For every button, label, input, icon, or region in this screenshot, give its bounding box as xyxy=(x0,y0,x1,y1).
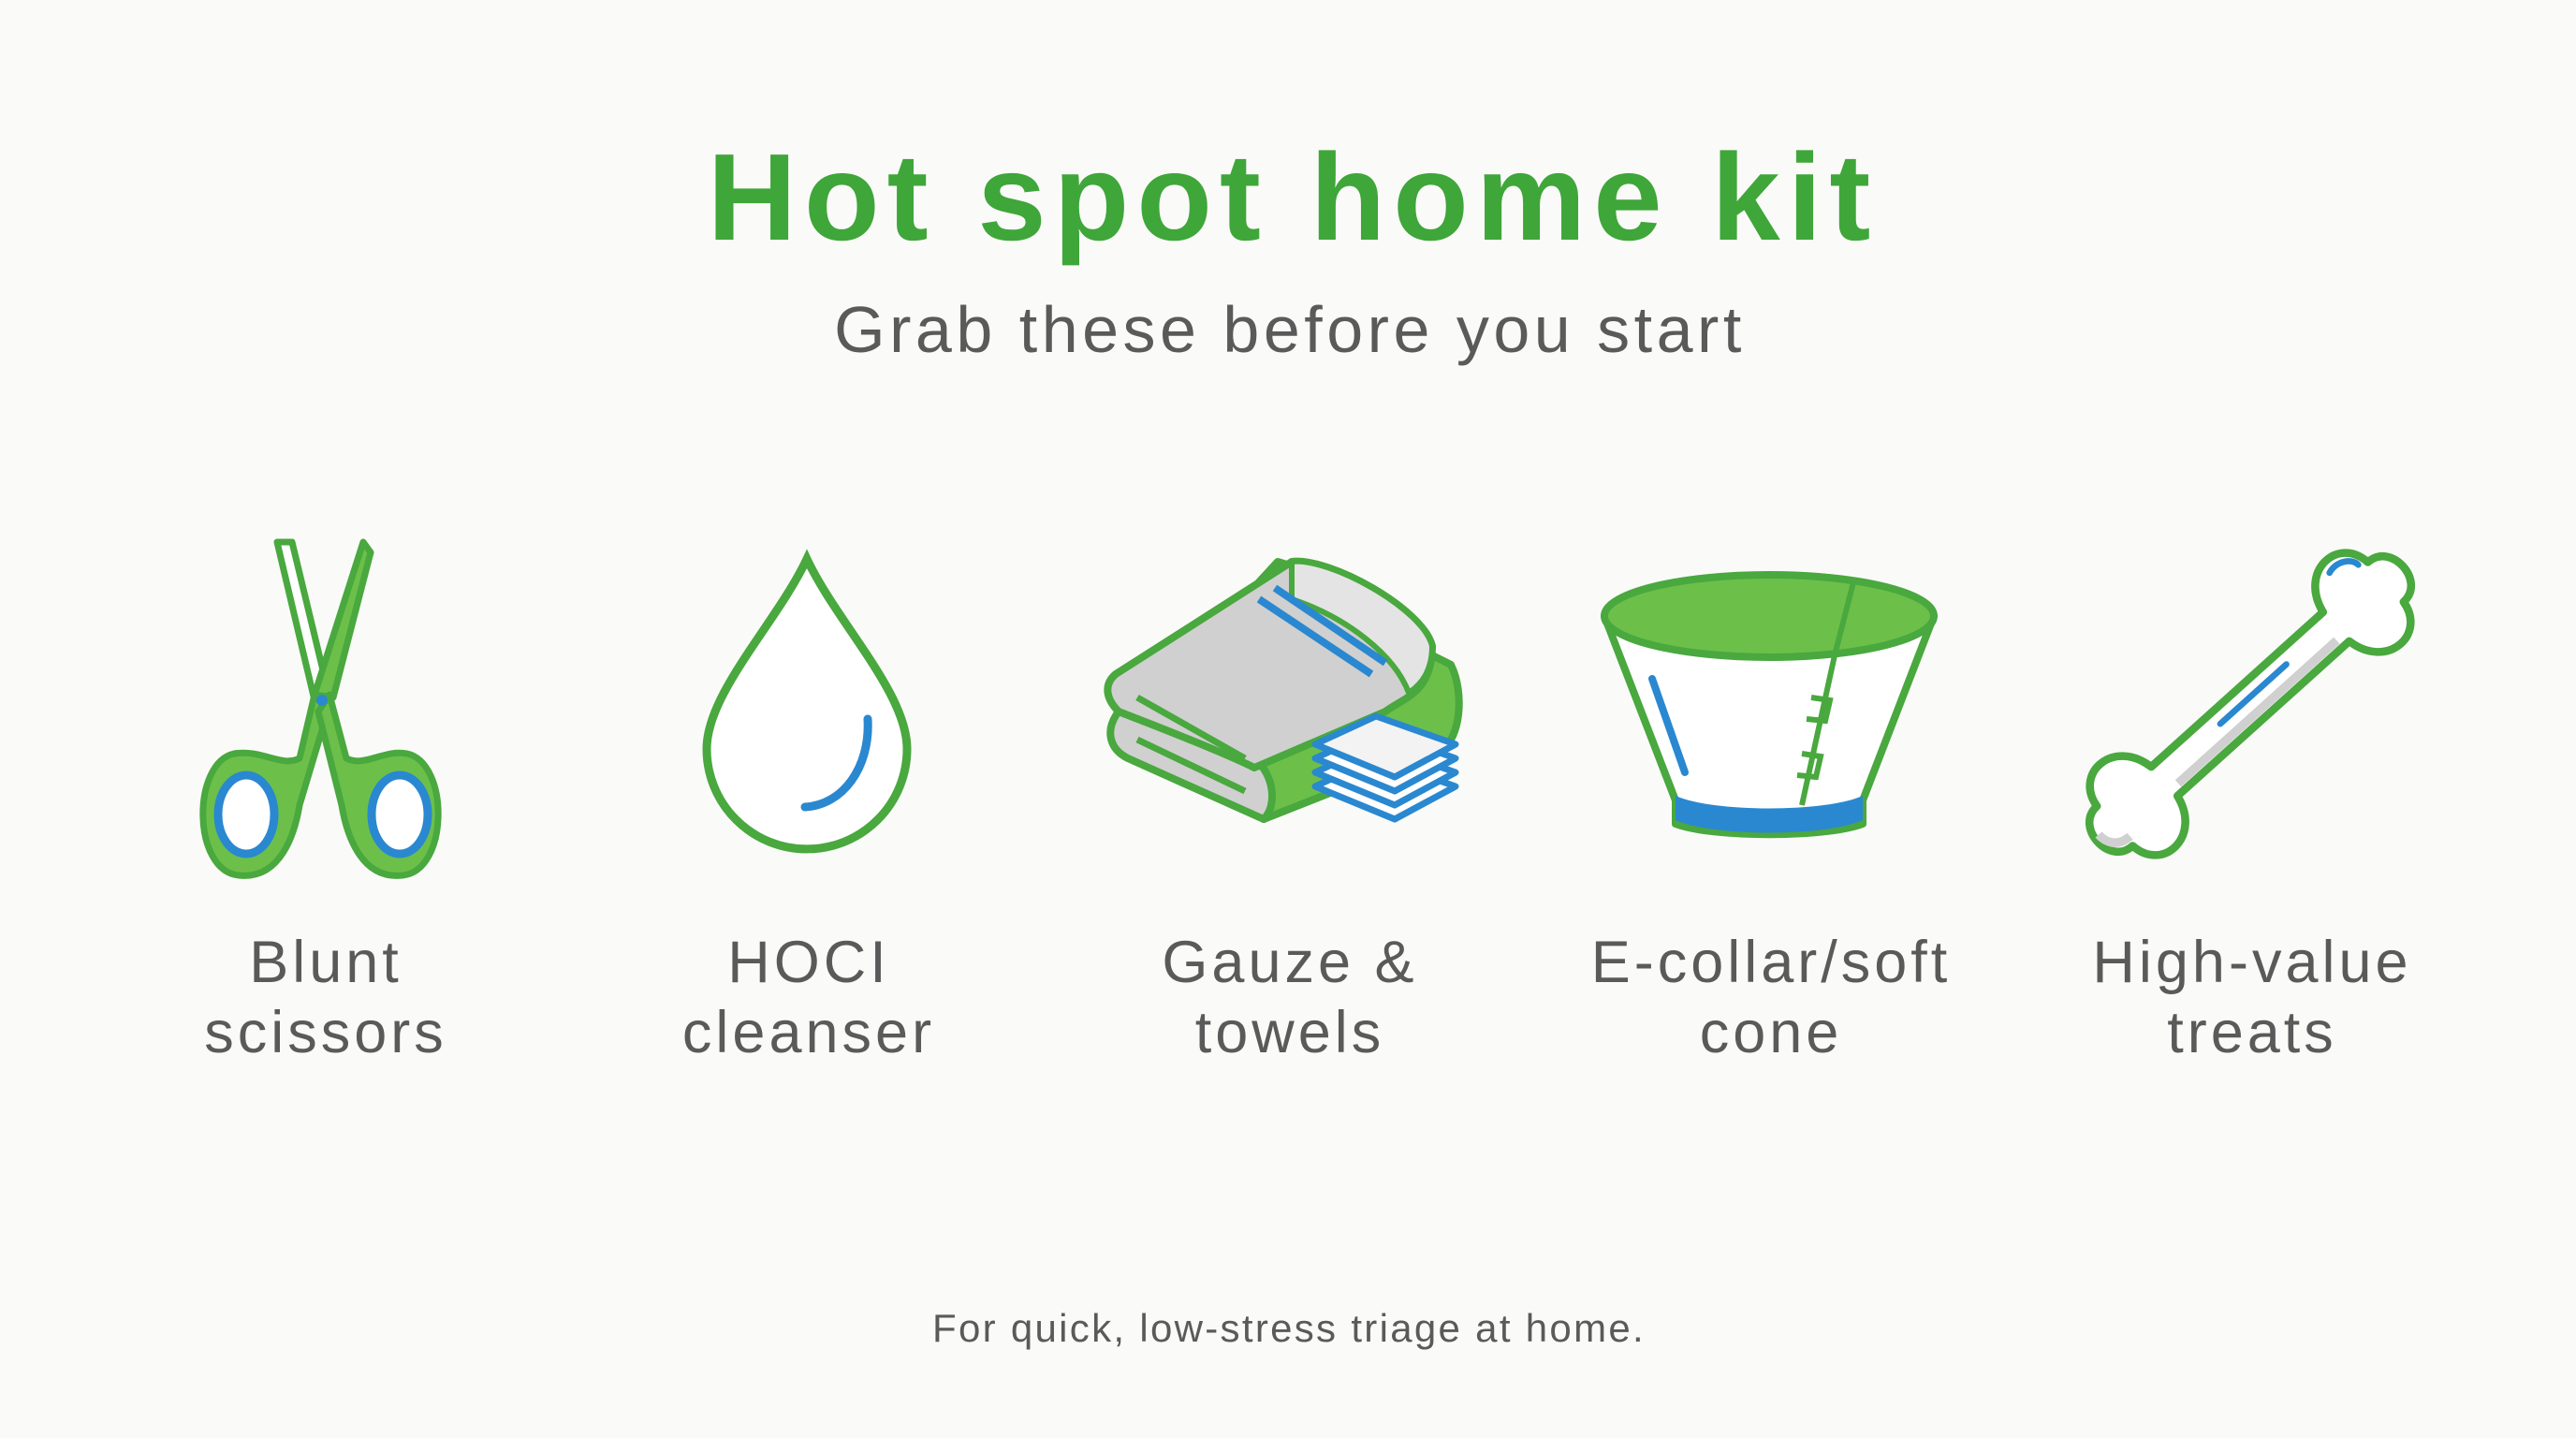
item: gauze & towels xyxy=(1107,562,1459,1065)
label: e-collar: E-collar/soft xyxy=(1591,930,1951,995)
subtitle: Grab these before you start xyxy=(834,293,1746,366)
item: e-collar xyxy=(1591,575,1951,1065)
label: HOCl cleanser: cleanser xyxy=(682,1000,935,1065)
label: gauze & towels: Gauze & xyxy=(1162,930,1418,995)
title: Hot spot home kit xyxy=(708,128,1878,266)
label: HOCl cleanser: HOCI xyxy=(727,930,890,995)
label: blunt scissors: Blunt xyxy=(249,930,402,995)
item: blunt scissors xyxy=(203,542,447,1065)
icon: water drop xyxy=(707,559,907,849)
label: blunt scissors: scissors xyxy=(204,1000,447,1065)
footer note: For quick, low-stress triage at home. xyxy=(932,1306,1646,1350)
icon: scissors xyxy=(203,542,438,875)
icon: towels and gauze xyxy=(1107,562,1459,819)
label: gauze & towels: towels xyxy=(1195,1000,1384,1065)
label: treats: treats xyxy=(2167,1000,2337,1065)
item: HOCl cleanser xyxy=(682,559,935,1065)
icon: cone xyxy=(1604,575,1934,834)
item: treats xyxy=(2060,525,2440,1065)
label: treats: High-value xyxy=(2092,930,2412,995)
icon: bone xyxy=(2060,525,2440,883)
label: e-collar: cone xyxy=(1700,1000,1842,1065)
